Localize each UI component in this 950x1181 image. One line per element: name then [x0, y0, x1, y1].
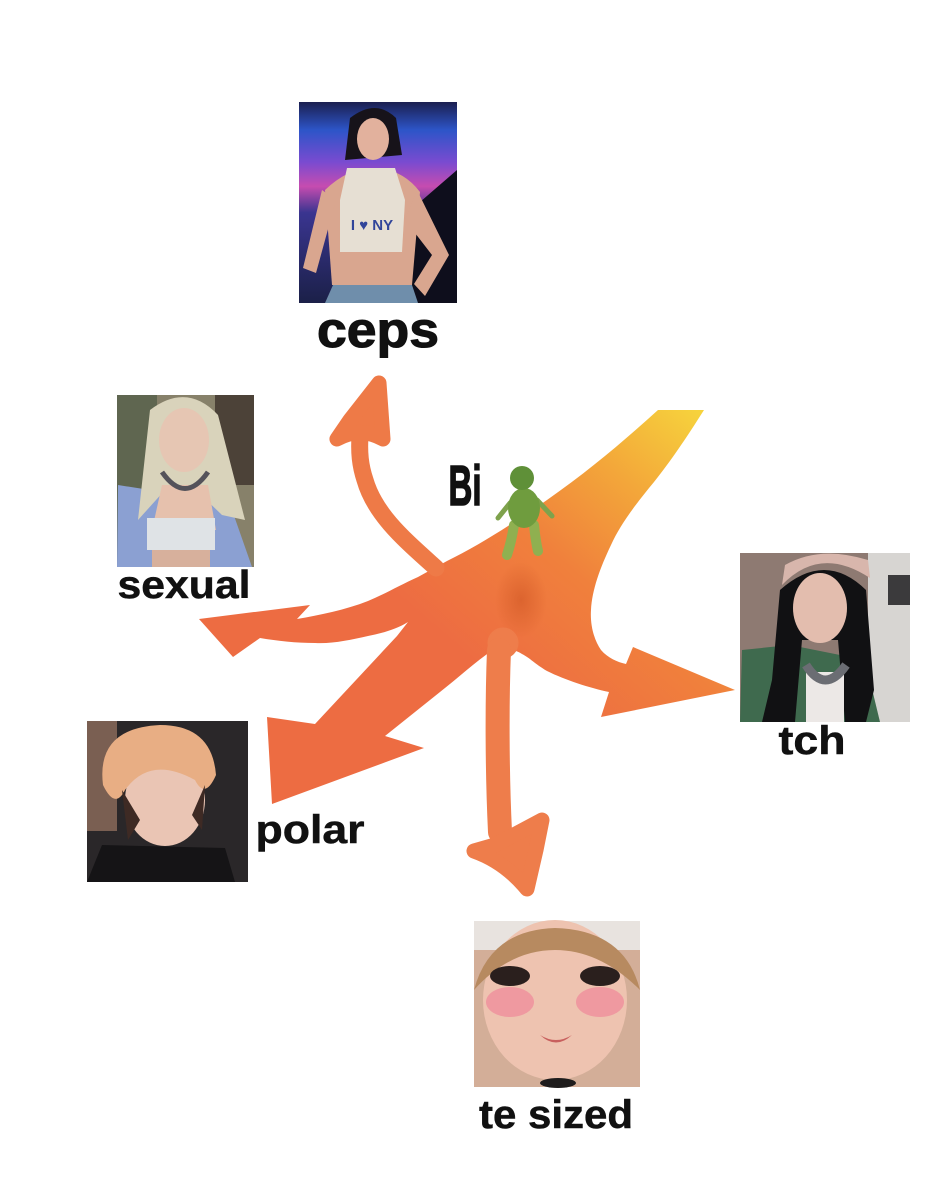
hand-drawn arrow to te sized	[474, 628, 542, 889]
photo: polar	[87, 721, 248, 882]
label: te sized: te sized	[479, 1093, 633, 1137]
photo: ceps	[299, 102, 457, 303]
hand-drawn arrow to ceps	[337, 383, 436, 568]
photo: sexual	[117, 395, 254, 567]
label: ceps: ceps	[317, 302, 439, 358]
photo: te sized	[474, 920, 640, 1088]
shirt print: I ♥ NY	[351, 217, 393, 234]
label: Bi: Bi	[448, 454, 482, 518]
photo: tch	[740, 553, 910, 722]
label: sexual: sexual	[118, 564, 250, 607]
label: polar: polar	[256, 808, 364, 852]
main orange road with branching arrows	[199, 410, 735, 804]
icon: green figure walking	[498, 466, 552, 555]
label: tch: tch	[778, 719, 846, 763]
